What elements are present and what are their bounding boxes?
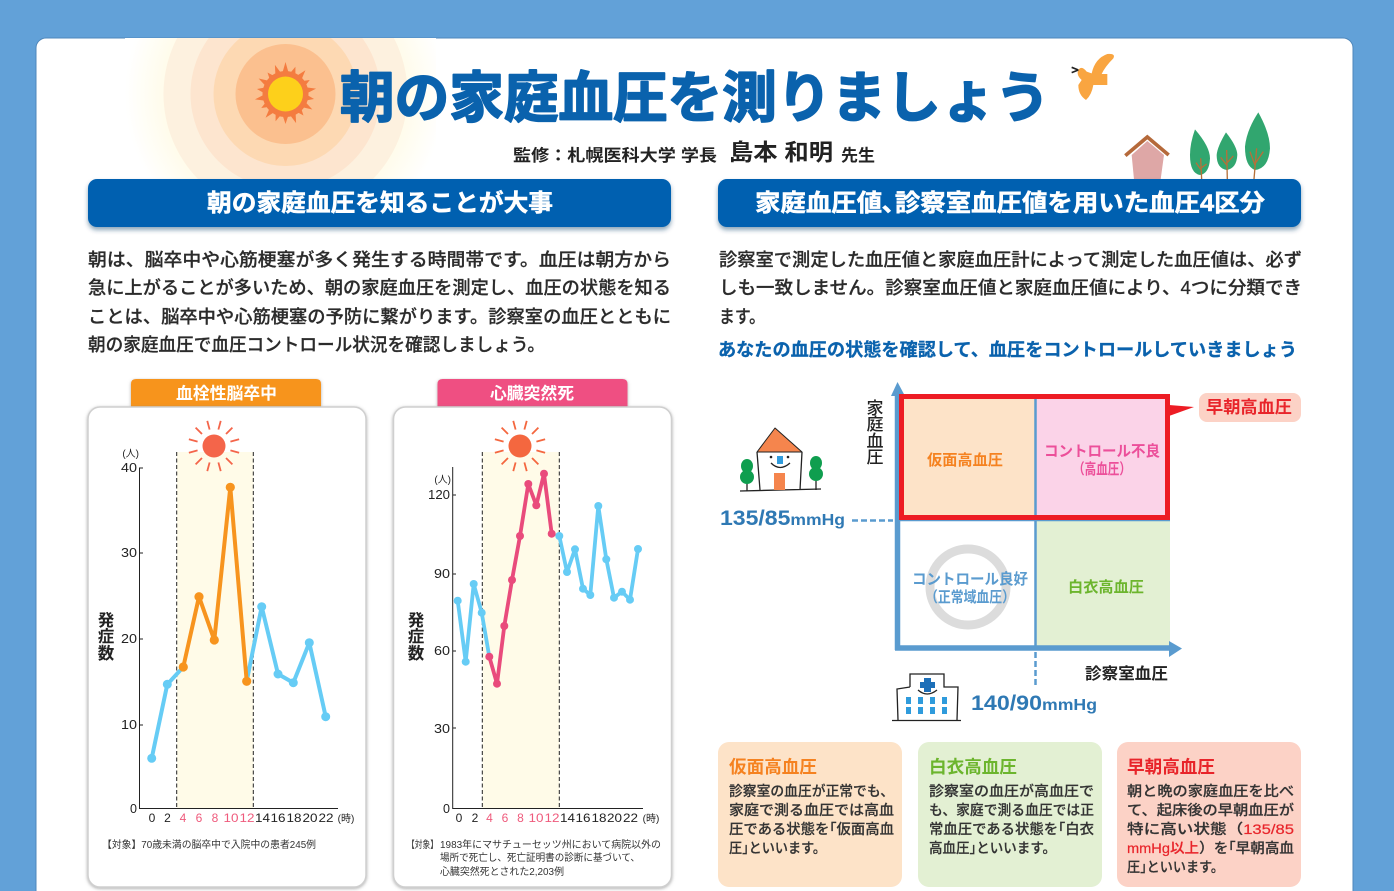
x axis labels: 8	[517, 811, 524, 825]
x axis labels: 16	[270, 811, 286, 825]
footnote: 【対象】70歳未満の脳卒中で入院中の患者245例	[102, 838, 316, 851]
normal ring	[930, 549, 1006, 625]
supervisor credit: 先生	[841, 146, 875, 165]
illustration: rising sun with halo	[125, 38, 436, 179]
y axis labels: 40	[121, 461, 137, 475]
axis title: home	[866, 399, 884, 467]
x axis labels: 6	[502, 811, 509, 825]
supervisor credit: 島本 和明	[729, 139, 833, 165]
tab: stroke: 血栓性脳卒中	[176, 383, 277, 403]
axis title: home: 血	[866, 432, 884, 451]
text block: left intro: 急に上がることが多いため、朝の家庭血圧を測定し、血圧の状態を知る	[88, 277, 671, 298]
x axis labels: 12	[544, 811, 560, 825]
axis title: home: 圧	[866, 448, 884, 467]
text block: left intro: 朝の家庭血圧で血圧コントロール状況を確認しましょう。	[88, 335, 545, 355]
chart: blood pressure quadrant	[720, 382, 1301, 715]
x axis labels: 20	[607, 811, 622, 825]
chart: blood pressure quadrant: （高血圧）	[1073, 460, 1131, 478]
title: 朝の家庭血圧を測りましょう	[340, 67, 1050, 129]
y axis labels: 30	[434, 722, 450, 736]
y axis labels: 60	[434, 644, 450, 658]
y axis labels: 30	[121, 546, 137, 560]
text block: left intro: 朝は、脳卒中や心筋梗塞が多く発生する時間帯です。血圧は朝方から	[88, 249, 671, 270]
y axis title: 症	[98, 627, 115, 646]
icon: home	[740, 428, 823, 491]
x axis labels: 2	[164, 811, 171, 825]
tab: stroke	[131, 379, 321, 407]
x axis labels: 10	[224, 811, 239, 825]
x axis labels: 10	[528, 811, 544, 825]
y axis title	[98, 611, 115, 663]
panel: morning hypertension: 圧｣といいます。	[1127, 859, 1224, 875]
y axis labels: 120	[428, 488, 450, 502]
x axis labels: 12	[240, 811, 255, 825]
text block: right intro: 診察室で測定した血圧値と家庭血圧計によって測定した血圧値は、必ず	[719, 250, 1302, 270]
footnote: 【対象】	[407, 838, 438, 851]
chart: blood pressure quadrant: 白衣高血圧	[1068, 578, 1144, 596]
icon: hospital	[892, 674, 961, 720]
morning band	[482, 452, 560, 808]
x axis labels: 2	[472, 811, 479, 825]
threshold: home: 135/85 mmHg	[720, 507, 845, 530]
y axis labels: 0	[443, 802, 450, 816]
y axis title: 発	[98, 611, 115, 630]
x axis labels: 0	[456, 811, 463, 825]
panel: stroke chart	[88, 379, 366, 887]
x axis labels: (時)	[338, 813, 354, 825]
x axis labels: 14	[255, 811, 270, 825]
footnote: 心臓突然死とされた2,203例	[440, 865, 564, 878]
y axis labels: (人)	[434, 475, 451, 486]
footnote: 場所で死亡し、死亡証明書の診断に基づいて、	[440, 851, 640, 864]
emphasised message: あなたの血圧の状態を確認して、血圧をコントロールしていきましょう	[718, 339, 1297, 360]
quadrant fills	[900, 397, 1170, 646]
text block: right intro	[719, 250, 1302, 327]
x axis labels: 22	[318, 811, 334, 825]
panel: morning hypertension: 特に高い状態（ 135/85	[1127, 821, 1294, 837]
x axis labels	[456, 811, 659, 825]
x axis labels: 4	[180, 811, 187, 825]
y axis title: 数	[408, 644, 425, 663]
panel: morning hypertension: mmHg以上）を｢早朝高血	[1127, 840, 1294, 856]
axes	[453, 467, 643, 808]
chart: blood pressure quadrant: コントロール良好	[912, 570, 1028, 588]
panel: white coat hypertension: 白衣高血圧	[929, 757, 1017, 777]
x axis labels: 20	[302, 811, 318, 825]
text block: right intro: しも一致しません。診察室血圧値と家庭血圧値により、4つに分類でき	[719, 278, 1302, 298]
panel: white coat hypertension	[918, 742, 1102, 887]
supervisor credit	[513, 139, 875, 165]
heading bar: right section	[718, 179, 1301, 227]
panel: masked hypertension: 圧である状態を｢仮面高血	[729, 821, 894, 837]
footnote: 1983年にマサチューセッツ州において病院以外の	[440, 838, 661, 851]
chart: blood pressure quadrant: コントロール不良	[1044, 442, 1160, 460]
panel: white coat hypertension: 高血圧｣といいます。	[929, 840, 1056, 856]
x axis labels: 22	[623, 811, 638, 825]
icon: sun	[189, 421, 239, 471]
callout: morning hypertension: 早朝高血圧	[1206, 397, 1292, 417]
y axis labels: 10	[121, 718, 137, 732]
x axis labels: 14	[560, 811, 575, 825]
panel: masked hypertension: 圧｣といいます。	[729, 840, 826, 856]
axes and thresholds	[852, 382, 1182, 686]
tab: cardiac	[438, 379, 628, 407]
x axis labels: (時)	[643, 813, 659, 825]
icon: sun	[495, 421, 545, 471]
y axis labels	[121, 449, 139, 816]
axis title: clinic: 診察室血圧	[1085, 664, 1168, 683]
morning band	[177, 452, 254, 808]
quadrant labels: 仮面高血圧	[927, 451, 1003, 469]
text block: right intro: ます。	[719, 307, 765, 327]
x axis labels: 16	[576, 811, 591, 825]
threshold: clinic: 140/90 mmHg	[971, 692, 1097, 715]
y axis title: 数	[98, 644, 115, 663]
y axis labels: (人)	[122, 449, 139, 460]
line chart: cardiac death onset	[454, 470, 642, 688]
axis title: home: 家	[866, 399, 884, 418]
x axis labels: 4	[486, 811, 493, 825]
panel: masked hypertension: 仮面高血圧	[729, 757, 817, 777]
y axis title	[408, 611, 425, 663]
panel: sudden cardiac death chart	[394, 379, 672, 887]
panel: masked hypertension	[718, 742, 902, 887]
panel: white coat hypertension: も、家庭で測る血圧では正	[929, 802, 1094, 818]
y axis labels: 90	[434, 567, 450, 581]
morning hypertension frame	[902, 396, 1168, 518]
y axis labels: 0	[130, 802, 137, 816]
chart: blood pressure quadrant: （正常域血圧）	[925, 588, 1015, 606]
panel: white coat hypertension: 診察室の血圧が高血圧で	[929, 783, 1094, 799]
y axis labels	[428, 475, 451, 816]
heading bar: left section: 朝の家庭血圧を知ることが大事	[207, 189, 553, 217]
x axis labels: 8	[212, 811, 219, 825]
y axis title: 症	[408, 627, 425, 646]
x axis labels	[149, 811, 354, 825]
tab: cardiac: 心臓突然死	[490, 383, 575, 403]
x axis labels: 18	[286, 811, 302, 825]
panel: white coat hypertension: 常血圧である状態を｢白衣	[929, 821, 1094, 837]
illustration: orange bird	[1072, 54, 1114, 100]
panel: morning hypertension: 朝と晩の家庭血圧を比べ	[1127, 783, 1294, 799]
text block: left intro: ことは、脳卒中や心筋梗塞の予防に繋がります。診察室の血圧とともに	[88, 306, 671, 327]
y axis labels: 20	[121, 632, 137, 646]
x axis labels: 18	[592, 811, 607, 825]
panel: morning hypertension: 早朝高血圧	[1127, 757, 1215, 777]
illustration: small house and trees	[1125, 112, 1270, 179]
heading bar: left section	[88, 179, 671, 227]
footnote	[407, 838, 661, 878]
axes	[140, 468, 338, 808]
heading bar: right section: 家庭血圧値､診察室血圧値を用いた血圧4区分	[755, 190, 1265, 217]
line chart: stroke onset	[147, 483, 330, 763]
callout: morning hypertension	[1169, 393, 1301, 422]
panel: masked hypertension: 診察室の血圧が正常でも、	[729, 783, 894, 799]
panel: morning hypertension: て、起床後の早朝血圧が	[1127, 802, 1294, 818]
x axis labels: 0	[149, 811, 156, 825]
axis title: home: 庭	[866, 415, 884, 434]
x axis labels: 6	[196, 811, 203, 825]
supervisor credit: 監修：札幌医科大学 学長	[513, 145, 718, 165]
y axis title: 発	[408, 611, 425, 630]
panel: morning hypertension	[1117, 742, 1301, 887]
panel: masked hypertension: 家庭で測る血圧では高血	[729, 802, 894, 818]
text block: left intro	[88, 249, 671, 355]
